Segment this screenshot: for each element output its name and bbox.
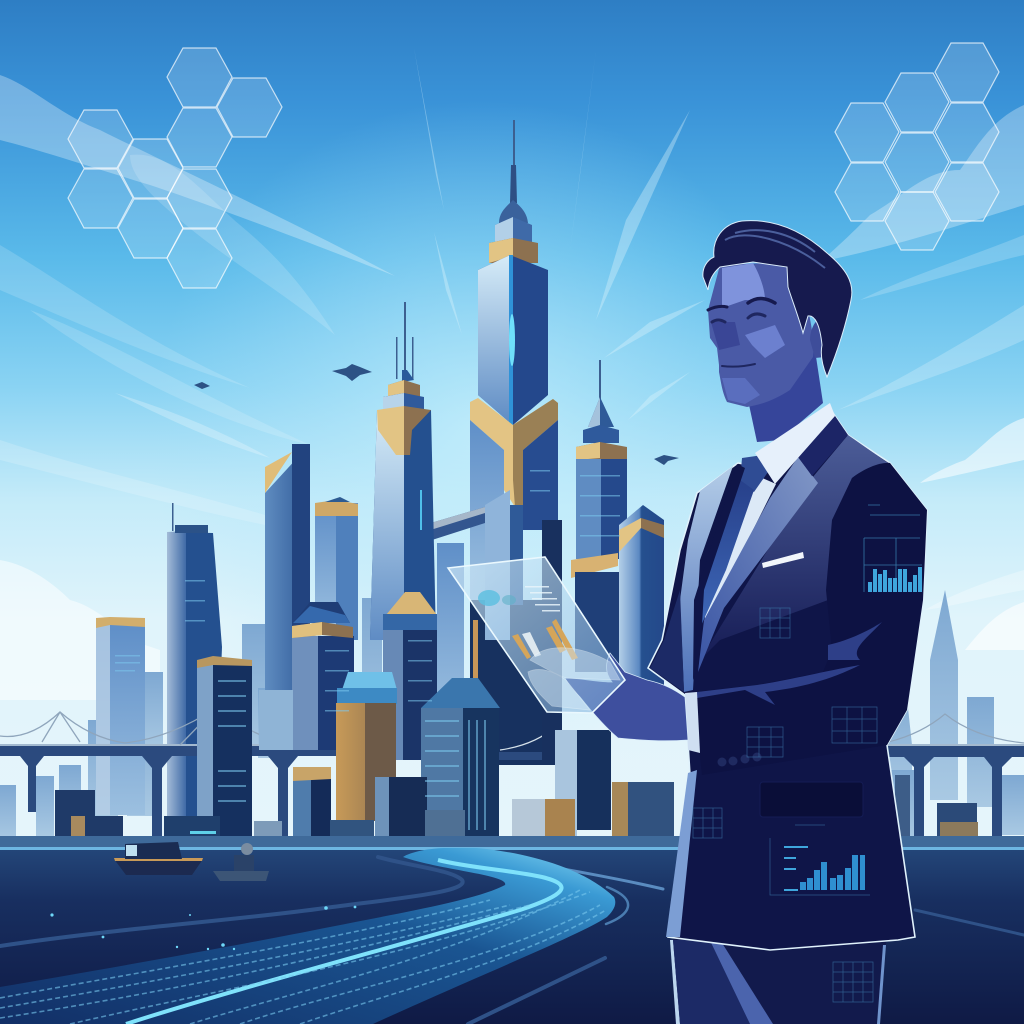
building windows [115,470,620,830]
jacket left light panel [680,466,733,692]
bridge: left [0,708,336,842]
chin highlight [722,378,760,404]
businessman [565,221,927,1024]
light rays [414,48,705,420]
legs [670,927,887,1024]
boat: large [114,842,203,875]
jacket left arm [650,590,684,692]
shirt panel [704,470,776,640]
cuff [685,692,700,753]
hair [703,221,852,377]
right sleeve [693,463,927,775]
sleeve wrinkles [697,622,882,705]
tower: skybridge [412,507,485,553]
tower: right spired [571,360,664,700]
clouds and wisps [0,75,1024,700]
tower: mid row [292,490,562,760]
sleeve bar chart [868,567,922,592]
forehead highlight [722,263,765,308]
tower: mid gold-topped left [265,444,358,734]
tower: far left slim [96,503,222,823]
tie [700,455,768,628]
dark lapel edge [693,464,745,680]
flying vehicles [194,364,679,465]
ground grey road lines [0,855,1024,1024]
hexagons: left cluster [68,48,282,288]
hexagons: right cluster [835,43,999,250]
horizon glow [0,847,1024,850]
low waterfront blocks [0,775,1024,848]
jacket body [648,413,927,950]
tower: central spire [470,120,558,765]
pocket chart labels [784,846,808,891]
cheek highlight [745,325,785,358]
holographic tablet [448,557,625,713]
shirt collar [755,403,835,484]
jacket front light strip [666,770,697,937]
ground [0,847,1024,1024]
tower: left tall spired [370,302,436,640]
bridge: right [498,714,1024,842]
background hazy towers [0,590,1024,840]
lapel [698,457,818,672]
boat: small [213,843,269,881]
fingers behind tablet [528,648,620,710]
pocket flap [760,782,863,817]
jacket buttons [718,752,762,766]
facial features [708,298,775,367]
pocket bar chart [800,855,865,890]
ground light sparks [50,906,356,950]
tower: foreground row [197,656,674,842]
neck [748,350,823,442]
ear [810,316,836,358]
right collar dark [798,413,848,476]
nose shade [711,322,740,350]
jacket chest [700,435,888,660]
hair highlights [725,230,825,268]
pocket square [762,552,804,568]
hand [565,653,688,741]
jacket grid panels [693,608,877,1002]
sleeve chart panel [864,505,922,592]
glowing data road [0,848,615,1024]
head [708,262,813,407]
